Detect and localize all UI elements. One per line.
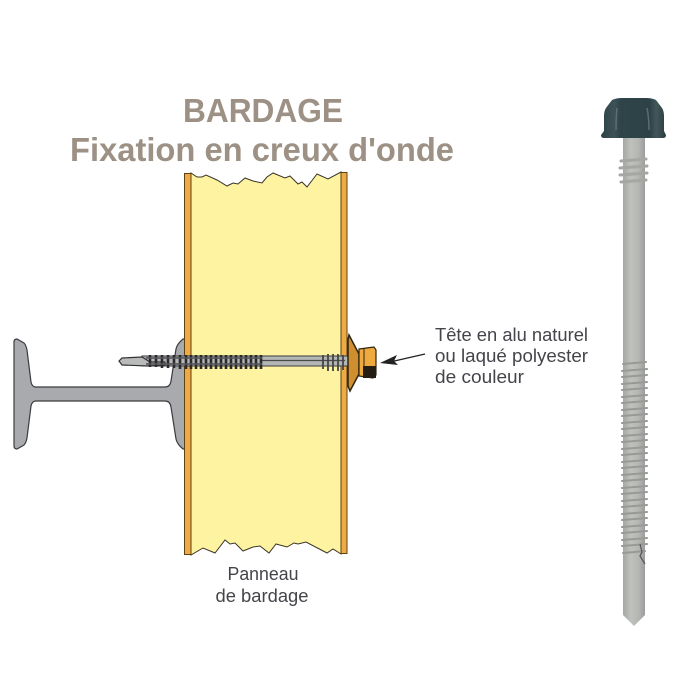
upper thread: [620, 159, 647, 182]
label: panel: de bardage: [216, 586, 308, 606]
title: [70, 92, 454, 168]
right facing sheet: [341, 172, 347, 554]
washer: [348, 335, 359, 391]
fixing screw in section: [119, 335, 376, 391]
main thread: [622, 362, 647, 553]
label: screw head: ou laqué polyester: [435, 346, 588, 366]
left facing sheet: [184, 174, 191, 554]
label: panel: Panneau: [228, 564, 298, 584]
I-beam support: [14, 339, 185, 449]
product photo: self-drilling screw: [601, 98, 666, 626]
label: screw head: Tête en alu naturel: [435, 325, 588, 345]
drill tip: [119, 357, 165, 366]
screw cap: [601, 98, 666, 138]
cap highlights: [616, 108, 649, 130]
panel: insulated cladding panel: [184, 172, 347, 555]
label: panel: [216, 564, 308, 606]
label: screw head: [435, 325, 588, 387]
screw body: [623, 138, 645, 626]
inner thread: [150, 355, 261, 369]
panel core: [191, 172, 341, 555]
arrow to screw head: [380, 354, 425, 365]
hex head: [359, 347, 376, 378]
outer thread: [323, 354, 343, 371]
screw shaft: [142, 356, 349, 366]
title: Fixation en creux d'onde: [70, 131, 454, 168]
drill flute: [640, 544, 645, 564]
title: BARDAGE: [183, 92, 343, 129]
label: screw head: de couleur: [435, 367, 524, 387]
